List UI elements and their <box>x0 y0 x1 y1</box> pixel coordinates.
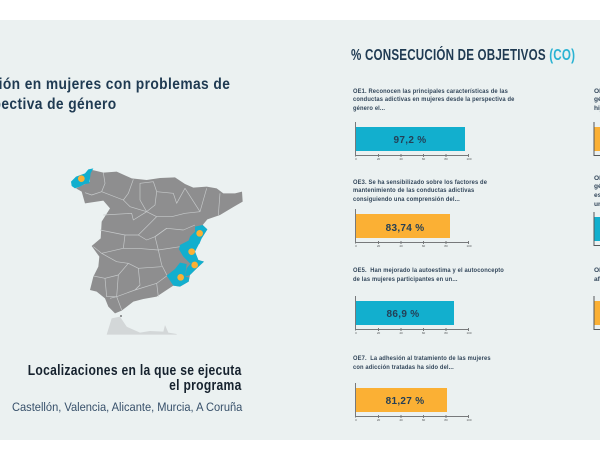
locations heading: Localizaciones en la que se ejecuta <box>28 363 242 379</box>
objective OE1 text <box>353 88 514 112</box>
objective OE3 text: consiguiendo una comprensión del... <box>353 196 460 203</box>
bar chart OE5: 0 <box>355 331 357 335</box>
bar chart OE7: 20 <box>377 418 380 422</box>
objective OE7 text: con adicción tratadas ha sido del... <box>353 364 454 371</box>
map of Spain <box>71 168 243 334</box>
bar chart OE3: 83,74 % <box>386 223 424 234</box>
objective OE6 text, clipped <box>594 267 600 283</box>
section heading: % CONSECUCIÓN DE OBJETIVOS (CO) <box>351 47 575 64</box>
peninsula <box>76 169 243 313</box>
bar chart OE7: 80 <box>444 418 448 422</box>
objective OE7 text: OE7. La adhesión al tratamiento de las mujeres <box>353 355 491 362</box>
bar chart OE3 <box>355 209 472 248</box>
bar chart OE1: 97,2 % <box>394 135 426 146</box>
objective OE7 text <box>353 355 491 371</box>
bar chart OE5: 40 <box>399 331 403 335</box>
objective OE5 text <box>353 267 504 283</box>
bar chart OE7: 60 <box>422 418 425 422</box>
bar chart OE1: 40 <box>399 157 403 161</box>
bar chart OE1: 0 <box>355 157 357 161</box>
bar chart OE3: 40 <box>399 244 403 248</box>
bar chart OE3: 80 <box>444 244 448 248</box>
highlighted region: Murcia <box>167 263 189 287</box>
bar chart OE1: 100 <box>466 157 472 161</box>
bar chart OE5: 20 <box>377 331 380 335</box>
bar chart OE7 <box>355 383 472 422</box>
bar chart OE4, clipped <box>594 212 600 246</box>
objective OE4 text, clipped <box>594 174 600 208</box>
Ceuta dot <box>120 315 122 317</box>
highlighted region: Castellón <box>188 225 207 244</box>
objective OE1 text: OE1. Reconocen las principales características de las <box>353 88 508 94</box>
bar chart OE5 <box>355 296 472 335</box>
highlighted region: Alicante <box>185 260 204 277</box>
objective OE3 text <box>353 178 487 203</box>
bar chart OE1 <box>355 122 472 161</box>
highlighted region: A Coruña <box>71 168 93 188</box>
bar chart OE2, clipped <box>594 122 600 156</box>
bar chart OE5: 80 <box>444 331 448 335</box>
bar chart OE6, clipped <box>594 296 600 330</box>
objective OE5 text: OE5. Han mejorado la autoestima y el autoconcepto <box>353 267 504 274</box>
province borders <box>85 173 220 310</box>
locations heading: el programa <box>170 378 242 394</box>
objective OE3 text: OE3. Se ha sensibilizado sobre los factores de <box>353 178 487 186</box>
bar chart OE5: 86,9 % <box>387 309 419 320</box>
bar chart OE3: 100 <box>466 244 472 248</box>
bar chart OE3: 20 <box>377 244 380 248</box>
bar chart OE7: 40 <box>399 418 403 422</box>
locations heading <box>28 363 242 394</box>
objective OE5 text: de las mujeres participantes en un... <box>353 276 458 283</box>
objective OE3 text: mantenimiento de las conductas adictivas <box>353 187 474 194</box>
markers <box>78 175 203 281</box>
bar chart OE5: 100 <box>466 331 472 335</box>
bar chart OE1: 20 <box>377 157 380 161</box>
locations list: Castellón, Valencia, Alicante, Murcia, A Coruña <box>12 400 242 414</box>
bar chart OE1: 80 <box>444 157 448 161</box>
highlighted region: Valencia <box>179 241 199 263</box>
bar chart OE1: 60 <box>422 157 425 161</box>
bar chart OE7: 0 <box>355 418 357 422</box>
objective OE1 text: conductas adictivas en mujeres desde la perspectiva de <box>353 96 514 103</box>
Ceuta and Strait silhouette <box>107 317 177 335</box>
bar chart OE3: 60 <box>422 244 425 248</box>
objective OE2 text, clipped <box>594 88 600 112</box>
bar chart OE7: 81,27 % <box>386 396 424 407</box>
bar chart OE7: 100 <box>466 418 472 422</box>
bar chart OE3: 0 <box>355 244 357 248</box>
bar chart OE5: 60 <box>422 331 425 335</box>
objective OE1 text: género el... <box>353 105 385 112</box>
